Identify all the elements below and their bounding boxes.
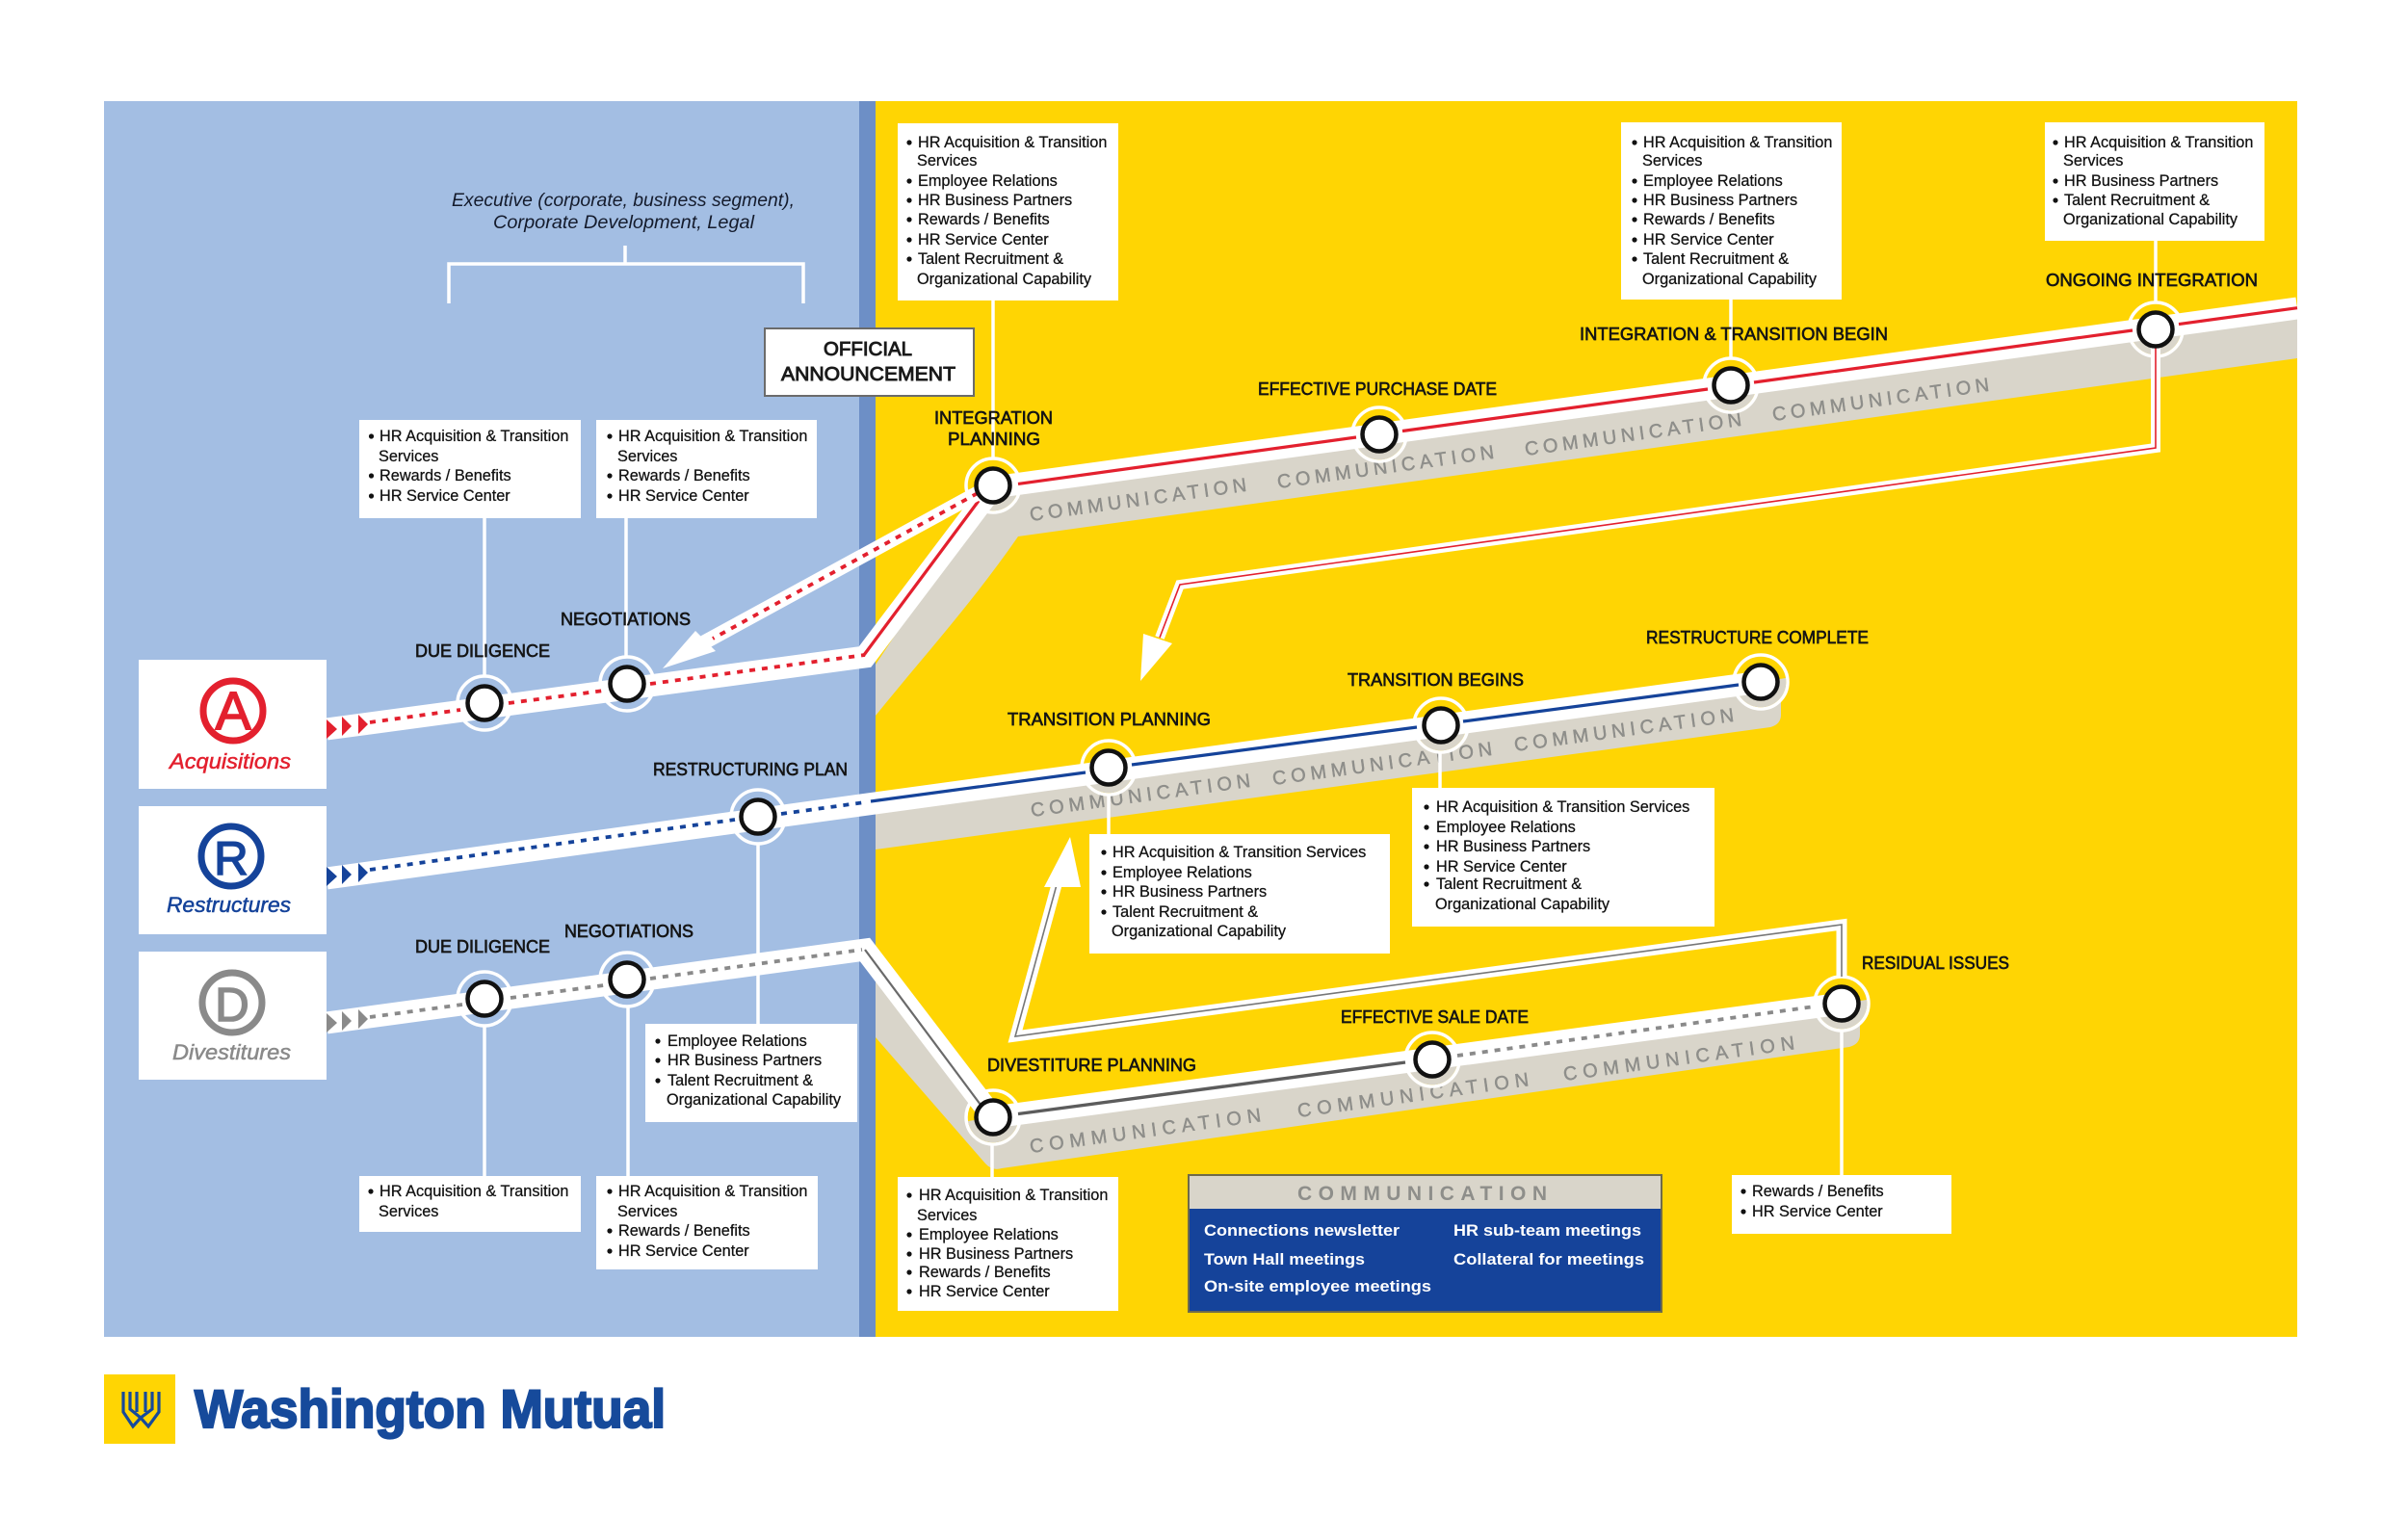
box: transition planning team: Talent Recruitment & [1112,903,1258,921]
box: integration and transition team [1621,122,1842,300]
box: ongoing integration team: HR Acquisition & Transition [2064,134,2253,151]
box: integration and transition team: Employee Relations [1643,172,1783,190]
box: restructuring plan team: Employee Relations [667,1032,807,1050]
track: acquisitions [327,308,2297,729]
milestone labels: INTEGRATION [934,408,1053,428]
panel: acquisitions badge [139,660,368,789]
panel: communication legend: Connections newsletter [1204,1221,1400,1240]
band labels: communication on acquisitions track: COMMUNICATION [1029,475,1248,526]
milestone labels: DUE DILIGENCE [415,937,550,956]
box: transition begins team: HR Service Center [1436,858,1567,876]
connector lines from milestones to team boxes [484,241,2156,1177]
box: negotiations team (divestitures): Rewards / Benefits [618,1222,750,1240]
box: due diligence team (divestitures): Services [379,1203,438,1220]
box: due diligence team (divestitures) [359,1176,581,1232]
milestone halos: blue side [458,657,785,1026]
text: executive group: Corporate Development, Legal [493,213,755,233]
box: restructuring plan team: Organizational Capability [667,1091,842,1109]
box: transition planning team: Organizational Capability [1112,923,1287,940]
band labels: communication on acquisitions track: COMMUNICATION [1276,442,1496,493]
box: integration and transition team: HR Acquisition & Transition [1643,134,1832,151]
milestone labels: DIVESTITURE PLANNING [987,1056,1196,1075]
box: restructuring plan team: Talent Recruitment & [667,1072,813,1089]
box: integration and transition team: Rewards / Benefits [1643,211,1775,228]
box: ongoing integration team [2045,122,2264,241]
box: negotiations team (divestitures): HR Service Center [618,1242,749,1260]
milestone labels: NEGOTIATIONS [564,922,694,941]
text: executive group: Executive (corporate, business segment), [452,191,795,211]
panel: pre-announcement background [104,101,859,1337]
panel: post-announcement background [876,101,2297,1337]
box: negotiations team (divestitures) [596,1176,818,1269]
box: transition planning team: HR Acquisition & Transition Services [1112,844,1366,861]
milestone labels: EFFECTIVE SALE DATE [1341,1007,1529,1027]
box: negotiations team (acquisitions) [596,420,817,518]
box: official announcement: ANNOUNCEMENT [781,364,955,385]
communication band: divestitures [876,963,1860,1169]
band labels: communication on divestitures track: COMMUNICATION [1029,1105,1262,1158]
box: negotiations team (acquisitions): HR Acquisition & Transition [618,428,807,445]
box: due diligence team (acquisitions): HR Service Center [380,487,510,505]
box: due diligence team (divestitures): HR Acquisition & Transition [380,1183,568,1200]
box: divestiture planning team: HR Service Center [919,1283,1050,1300]
box: transition begins team [1412,788,1714,927]
box: integration planning team: Rewards / Benefits [918,211,1050,228]
panel: communication legend: On-site employee meetings [1204,1277,1431,1295]
box: transition begins team: HR Business Partners [1436,838,1590,855]
arrow: integration planning feeds back to negotiations [663,493,978,668]
box: divestiture planning team: Rewards / Benefits [919,1264,1051,1281]
band labels: communication on restructures track: COMMUNICATION [1271,739,1494,790]
milestone labels: ONGOING INTEGRATION [2046,271,2258,290]
box: divestiture planning team: Employee Relations [919,1226,1059,1243]
track: divestitures [327,950,1842,1117]
box: negotiations team (acquisitions): HR Service Center [618,487,749,505]
box: official announcement: OFFICIAL [824,339,912,360]
panel: acquisitions badge: A [215,680,251,741]
arrow: ongoing integration to transition planning [1140,347,2156,681]
milestone labels: INTEGRATION & TRANSITION BEGIN [1580,325,1888,344]
box: restructuring plan team [645,1024,857,1122]
panel: divestitures badge: D [215,980,249,1032]
box: integration and transition team: Talent Recruitment & [1643,250,1789,268]
box: integration and transition team: Services [1642,152,1702,170]
track: restructures [327,682,1761,878]
panel: communication legend: HR sub-team meetings [1453,1221,1641,1240]
box: ongoing integration team: Organizational Capability [2063,211,2238,228]
panel: communication legend: COMMUNICATION [1297,1183,1547,1205]
box: integration and transition team: Organizational Capability [1642,271,1818,288]
milestone labels: PLANNING [948,430,1040,449]
milestone labels: RESIDUAL ISSUES [1862,954,2009,973]
panel: restructures badge [139,806,368,934]
box: negotiations team (acquisitions): Services [617,448,677,465]
box: due diligence team (acquisitions): Services [379,448,438,465]
milestone labels: RESTRUCTURING PLAN [653,760,848,779]
milestone labels: TRANSITION PLANNING [1008,710,1211,729]
communication band: restructures [876,682,1781,849]
band labels: communication on divestitures track [1029,1032,1795,1158]
box: negotiations team (divestitures): Services [617,1203,677,1220]
box: transition planning team: HR Business Partners [1112,883,1267,901]
box: transition begins team: Talent Recruitment & [1436,876,1582,893]
box: negotiations team (acquisitions): Rewards / Benefits [618,467,750,484]
box: transition planning team: Employee Relations [1112,864,1252,881]
band labels: communication on divestitures track: COMMUNICATION [1296,1069,1530,1122]
box: integration planning team: HR Service Center [918,231,1049,248]
box: residual issues team: HR Service Center [1752,1203,1883,1220]
box: integration planning team: Employee Relations [918,172,1058,190]
milestone labels: DUE DILIGENCE [415,641,550,661]
panel: communication legend [1189,1175,1662,1312]
box: integration planning team [898,123,1118,301]
band labels: communication on acquisitions track: COMMUNICATION [1771,375,1991,426]
panel: communication legend: Collateral for meetings [1453,1250,1644,1268]
box: transition begins team: HR Acquisition & Transition Services [1436,798,1689,816]
band labels: communication on acquisitions track [1029,375,1991,526]
box: residual issues team: Rewards / Benefits [1752,1183,1884,1200]
milestone halos: yellow side [966,302,2183,1144]
milestone labels: EFFECTIVE PURCHASE DATE [1258,379,1497,399]
box: ongoing integration team: HR Business Partners [2064,172,2218,190]
panel: acquisitions badge: Acquisitions [168,749,291,773]
communication band: acquisitions [876,308,2297,716]
panel: official announcement divider strip [859,101,876,1337]
milestone circles [468,312,2173,1135]
milestone labels [415,271,2258,1075]
band labels: communication on restructures track: COMMUNICATION [1513,705,1736,756]
box: transition begins team: Employee Relations [1436,819,1576,836]
band labels: communication on restructures track [1030,705,1736,822]
box: divestiture planning team: HR Business Partners [919,1245,1073,1263]
text: executive group [452,191,795,233]
box: integration planning team: Services [917,152,977,170]
logo: Washington Mutual wordmark: Washington Mutual [195,1378,666,1439]
panel: restructures badge: Restructures [167,893,291,917]
box: integration planning team: Talent Recruitment & [918,250,1063,268]
box: residual issues team [1732,1175,1951,1234]
milestone labels: TRANSITION BEGINS [1348,670,1524,690]
panel: communication legend: Town Hall meetings [1204,1250,1365,1268]
box: integration planning team: HR Acquisition & Transition [918,134,1107,151]
box: integration planning team: Organizational Capability [917,271,1092,288]
box: integration planning team: HR Business Partners [918,192,1072,209]
panel: divestitures badge: Divestitures [172,1040,291,1064]
box: official announcement [765,328,974,396]
box: restructuring plan team: HR Business Partners [667,1052,822,1069]
box: divestiture planning team: Services [917,1207,977,1224]
band labels: communication on divestitures track: COMMUNICATION [1562,1032,1795,1085]
box: transition planning team [1089,834,1390,954]
box: due diligence team (acquisitions): Rewards / Benefits [380,467,511,484]
box: ongoing integration team: Services [2063,152,2123,170]
milestone labels: RESTRUCTURE COMPLETE [1646,628,1869,647]
logo: Washington Mutual mark [104,1374,175,1444]
box: due diligence team (acquisitions): HR Acquisition & Transition [380,428,568,445]
arrow: residual issues to transition planning [1015,837,1842,1036]
box: ongoing integration team: Talent Recruitment & [2064,192,2210,209]
box: divestiture planning team: HR Acquisition & Transition [919,1187,1108,1204]
box: integration and transition team: HR Service Center [1643,231,1774,248]
box: divestiture planning team [898,1177,1118,1311]
box: integration and transition team: HR Business Partners [1643,192,1797,209]
milestone labels: NEGOTIATIONS [561,610,691,629]
box: due diligence team (acquisitions) [359,420,581,518]
panel: divestitures badge [139,952,368,1080]
box: negotiations team (divestitures): HR Acquisition & Transition [618,1183,807,1200]
box: transition begins team: Organizational Capability [1435,896,1610,913]
panel: restructures badge: R [214,833,249,885]
band labels: communication on acquisitions track: COMMUNICATION [1524,409,1743,460]
band labels: communication on restructures track: COMMUNICATION [1030,771,1252,822]
bracket: executive group span [449,246,803,303]
